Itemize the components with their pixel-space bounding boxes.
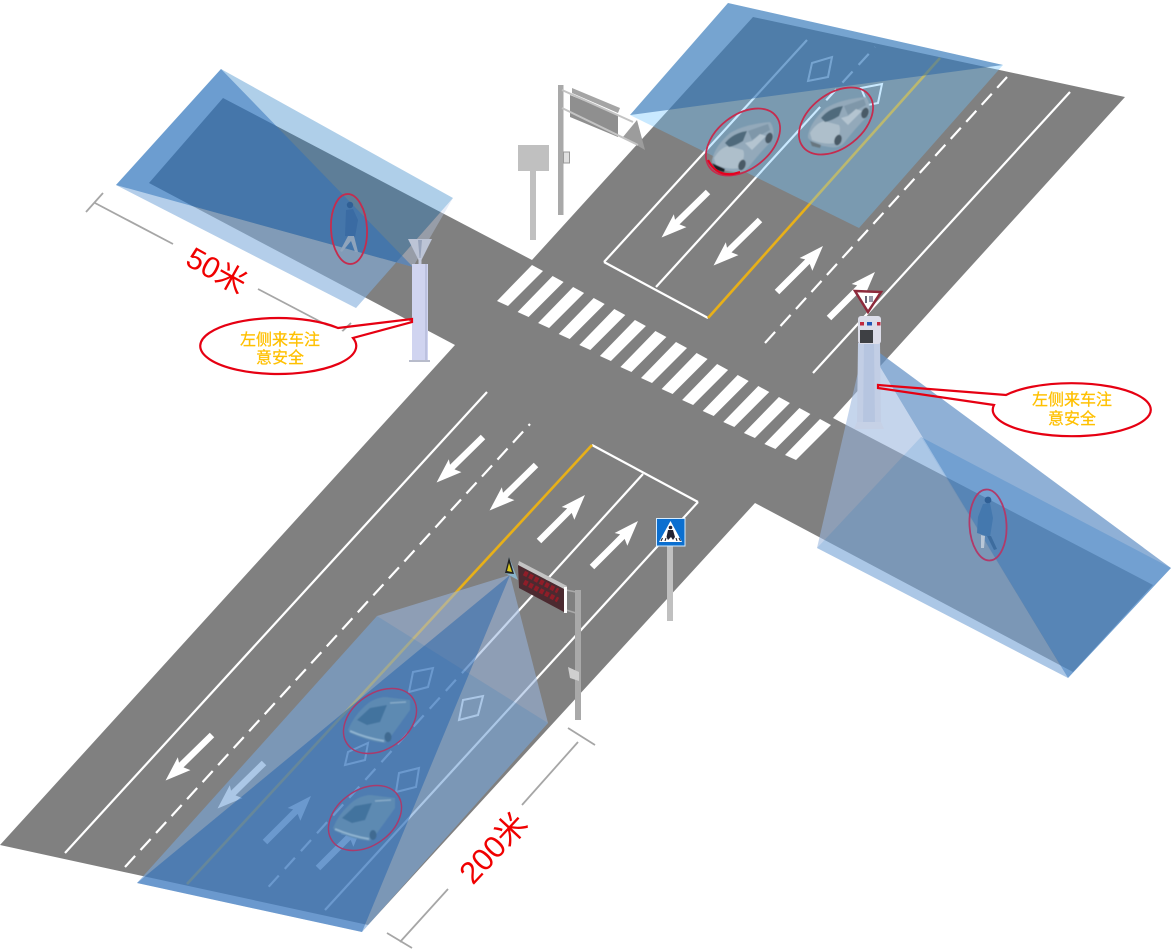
callout: west warning: 意安全 (256, 348, 304, 367)
callout: east warning (878, 382, 1151, 436)
callout: east warning: 意安全 (1048, 409, 1096, 428)
car: south upper (348, 697, 410, 743)
car: north left (712, 122, 774, 172)
callout: west warning (200, 318, 412, 376)
callout: west warning: 左侧来车注 (240, 331, 320, 349)
detection zone: east (817, 342, 1171, 678)
overhead gantry with sign (558, 85, 645, 215)
dimension: 50 m: 50米 (181, 242, 252, 301)
road markings (65, 40, 1070, 910)
variable message sign with pole (505, 557, 581, 720)
detection ellipses (316, 74, 1008, 864)
icon: pedestrian crossing sign (656, 518, 685, 621)
south road lane lines (65, 392, 698, 910)
lane arrows (160, 186, 882, 875)
callout: east warning: 左侧来车注 (1032, 391, 1112, 409)
pedestrian: west (340, 202, 358, 252)
car: south lower (333, 795, 395, 841)
east warning pole (854, 291, 884, 429)
pedestrian: east (977, 497, 997, 550)
detection zone: south (137, 575, 548, 932)
icon: yield triangle sign (855, 291, 881, 312)
zebra crossing (497, 265, 831, 460)
west warning pole (408, 239, 432, 362)
dimension: 50 m (86, 193, 351, 340)
north road lane lines (604, 40, 1070, 373)
detection zone: west (116, 69, 453, 308)
car: north right (808, 97, 870, 148)
diamond road markings (345, 57, 882, 792)
roadside blank sign (518, 145, 549, 240)
icon: warning triangle (505, 557, 518, 580)
dimension: 200 m (387, 728, 595, 948)
detection zone: north (630, 3, 1003, 228)
dimension: 200 m: 200米 (452, 806, 534, 891)
